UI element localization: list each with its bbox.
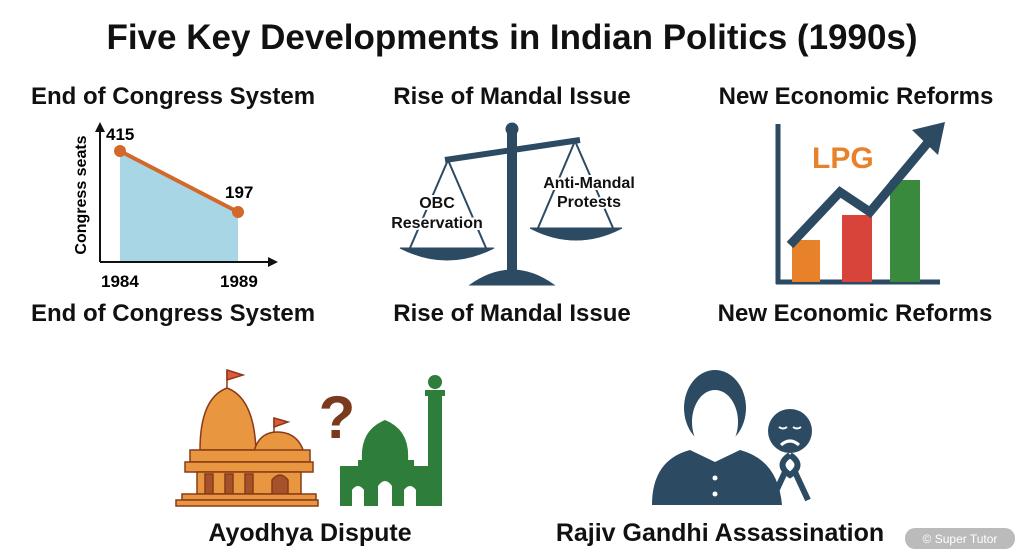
heading: end of congress: End of Congress System: [31, 83, 315, 110]
chart: congress seats: 1989: [220, 272, 258, 291]
icon: sad face and ribbon: [768, 409, 812, 500]
icon: temple: [176, 370, 318, 506]
heading repeat: end of congress: End of Congress System: [31, 300, 315, 327]
icon: person: [652, 370, 782, 505]
text: scale labels: Protests: [557, 194, 621, 211]
chart: congress seats: Congress seats: [73, 135, 90, 255]
label: rajiv: Rajiv Gandhi Assassination: [556, 519, 884, 547]
heading repeat: mandal: Rise of Mandal Issue: [393, 300, 631, 327]
text: scale labels: [391, 175, 635, 232]
icon: question mark: ?: [319, 384, 355, 451]
text: scale labels: Reservation: [391, 215, 483, 232]
watermark: © Super Tutor: [923, 532, 997, 546]
chart: congress seats: 197: [225, 183, 253, 202]
chart: congress seats: [73, 122, 278, 291]
icon: mosque: [340, 375, 445, 506]
watermark: [905, 528, 1015, 549]
heading repeat: economic reforms: New Economic Reforms: [718, 300, 992, 327]
icon: scale: [400, 123, 622, 285]
chart: congress seats: 1984: [101, 272, 139, 291]
heading: mandal: Rise of Mandal Issue: [393, 83, 631, 110]
label: ayodhya: Ayodhya Dispute: [208, 519, 412, 547]
text: scale labels: Anti-Mandal: [543, 175, 635, 192]
chart: LPG: [776, 122, 945, 284]
chart: congress seats: 415: [106, 125, 134, 144]
title: Five Key Developments in Indian Politics (1990s): [106, 18, 918, 57]
text: scale labels: OBC: [419, 195, 455, 212]
heading: economic reforms: New Economic Reforms: [719, 83, 993, 110]
chart: LPG: LPG: [812, 142, 874, 175]
